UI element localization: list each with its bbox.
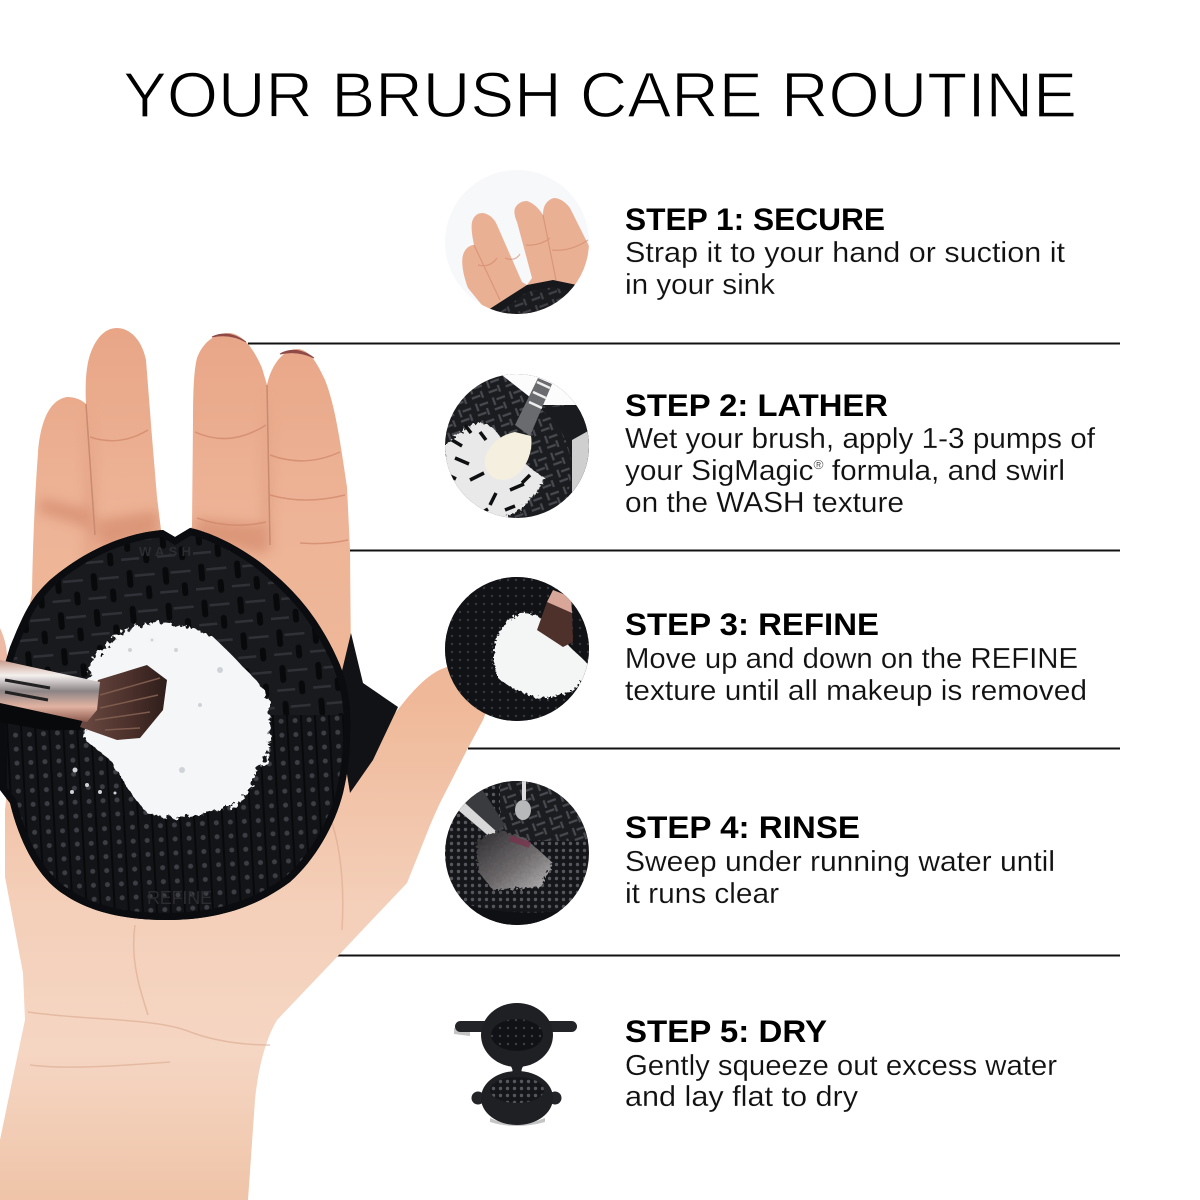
step 2 text xyxy=(625,387,1095,519)
fingertip at left edge xyxy=(0,628,7,664)
foam xyxy=(85,623,270,817)
step 1 icon: hand on mat xyxy=(462,198,589,314)
lower lobe xyxy=(472,1092,484,1104)
cleansing mat strap xyxy=(335,633,398,793)
hand holding cleansing mat: REFINE xyxy=(147,888,212,908)
step 1 text xyxy=(625,201,1065,301)
step 3 text xyxy=(625,606,1087,707)
step 3 text: STEP 3: REFINE xyxy=(625,606,879,642)
step 2 text: on the WASH texture xyxy=(625,487,904,519)
finger separation lines xyxy=(86,385,270,545)
step 2 text: ® xyxy=(814,457,824,472)
step 4 text: Sweep under running water until xyxy=(625,846,1055,878)
step 2 text: Wet your brush, apply 1-3 pumps of xyxy=(625,423,1095,455)
step 1 text: in your sink xyxy=(625,269,776,301)
mat rim xyxy=(0,528,351,920)
divider lines xyxy=(248,344,1120,956)
step 5 icon: folded mat drying xyxy=(454,1003,577,1126)
step 2 icon: lather xyxy=(445,372,590,520)
step 3 text: Move up and down on the REFINE xyxy=(625,643,1078,675)
step 3 text: texture until all makeup is removed xyxy=(625,675,1087,707)
upper lobe xyxy=(455,1021,577,1032)
step 5 text: and lay flat to dry xyxy=(625,1081,859,1113)
mat shadow xyxy=(454,1028,545,1126)
brush bristles xyxy=(80,665,167,740)
step 3 icon: refine xyxy=(445,577,590,721)
mat labels: WASH xyxy=(139,544,191,559)
step 4 text: STEP 4: RINSE xyxy=(625,809,860,845)
fingernails xyxy=(212,334,314,358)
foam specks xyxy=(70,638,223,794)
step 5 text: Gently squeeze out excess water xyxy=(625,1050,1058,1082)
neck xyxy=(508,1062,526,1080)
step 4 text: it runs clear xyxy=(625,878,780,910)
hand xyxy=(0,328,488,1200)
step 2 text: your SigMagic xyxy=(625,455,806,487)
finger creases xyxy=(90,425,348,544)
brush shadow xyxy=(0,700,85,730)
step 4 icon: rinse xyxy=(440,781,590,925)
title: YOUR BRUSH CARE ROUTINE xyxy=(123,59,1077,131)
brush ferrule xyxy=(0,660,100,722)
step 2 text: formula, and swirl xyxy=(824,455,1065,487)
step 1 text: STEP 1: SECURE xyxy=(625,201,885,237)
step 5 text xyxy=(625,1013,1058,1113)
finger shading xyxy=(36,478,274,556)
step 1 text: Strap it to your hand or suction it xyxy=(625,237,1065,269)
step 4 text xyxy=(625,809,1055,910)
cleansing mat xyxy=(0,520,360,925)
step 2 text: STEP 2: LATHER xyxy=(625,387,888,423)
step 5 text: STEP 5: DRY xyxy=(625,1013,827,1049)
hand holding cleansing mat xyxy=(0,328,488,1200)
palm creases xyxy=(28,795,343,1067)
